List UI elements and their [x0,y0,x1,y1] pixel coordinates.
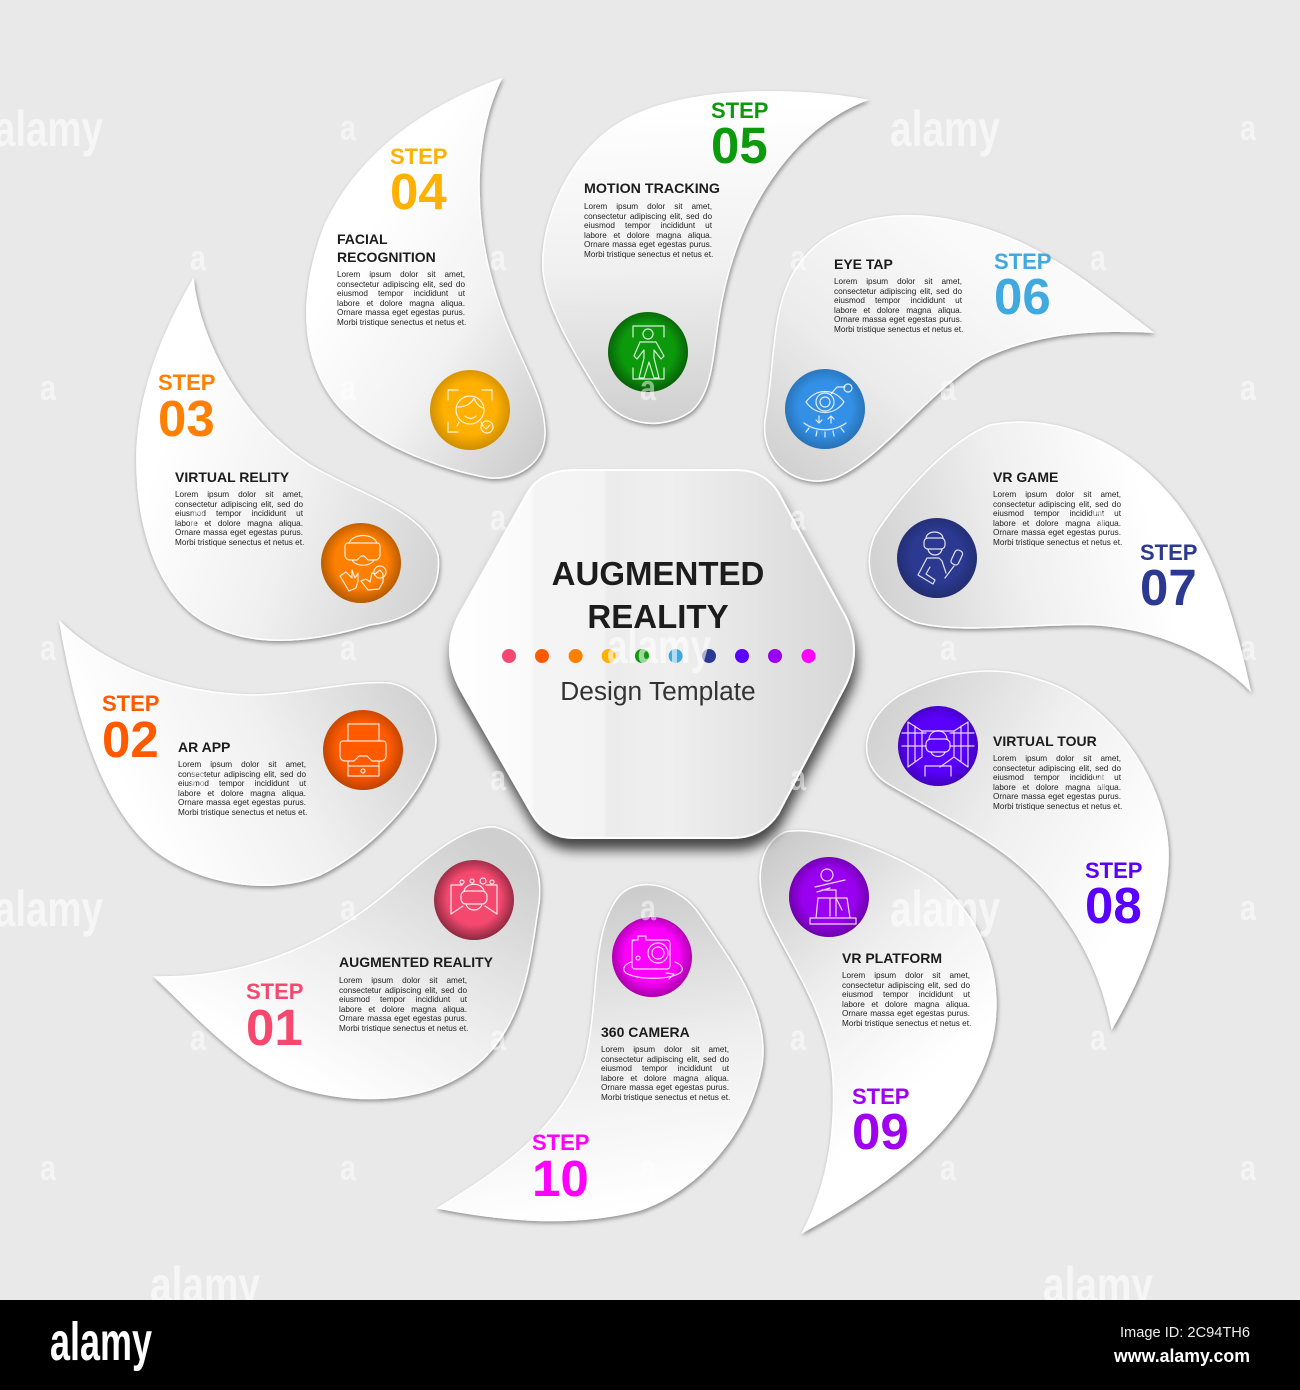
text block 04: Ornare massa eget egestas purus. [337,308,465,317]
heading: facial recognition: RECOGNITION [337,249,436,265]
watermarks: alamy [150,1257,260,1313]
watermarks: a [340,107,357,148]
text block 10 [601,1045,735,1105]
text block 01: Morbi tristique senectus et netus et. [339,1024,468,1033]
watermarks: a [640,887,657,928]
text block 03: eiusmod tempor incididunt ut [175,509,303,518]
center hexagon panel [450,470,854,838]
icon: phone and goggles [323,710,403,790]
text block 07: Morbi tristique senectus et netus et. [993,538,1122,547]
text block 01: labore et dolore magna aliqua. [339,1005,467,1014]
text block 08: Morbi tristique senectus et netus et. [993,802,1122,811]
watermarks: alamy [1043,1257,1153,1313]
watermarks: a [490,497,507,538]
icon: motion tracked body [608,312,688,392]
watermarks: a [40,627,57,668]
step label 02: STEP [102,691,159,716]
text block 09: Lorem ipsum dolor sit amet, [842,971,970,980]
step label 05: 05 [711,117,768,174]
text block 10: consectetur adipiscing elit, sed do [601,1055,729,1064]
text block 07 [993,490,1127,550]
text block 04: Morbi tristique senectus et netus et. [337,318,466,327]
text block 06: Lorem ipsum dolor sit amet, [834,277,962,286]
text block 05: consectetur adipiscing elit, sed do [584,212,712,221]
text block 02: Ornare massa eget egestas purus. [178,798,306,807]
icon: ar headset [434,860,514,940]
text block 05: eiusmod tempor incididunt ut [584,221,712,230]
watermarks: a [340,1147,357,1188]
watermarks: a [1240,627,1257,668]
text block 01: eiusmod tempor incididunt ut [339,995,467,1004]
step label 10: 10 [532,1150,589,1207]
watermarks: a [190,1017,207,1058]
watermarks: a [640,1147,657,1188]
text block 02: eiusmod tempor incididunt ut [178,779,306,788]
step label 03: 03 [158,390,215,447]
step label 04: 04 [390,163,447,220]
watermarks: a [940,627,957,668]
icon: goggles and hands [321,523,401,603]
text block 05: Morbi tristique senectus et netus et. [584,250,713,259]
heading: facial recognition: FACIAL [337,231,388,247]
text block 10: eiusmod tempor incididunt ut [601,1064,729,1073]
text block 06: labore et dolore magna aliqua. [834,306,962,315]
text block 08: Ornare massa eget egestas purus. [993,792,1121,801]
text block 08 [993,754,1127,814]
text block 05 [584,202,718,262]
heading: facial recognition [337,231,436,265]
step label 06: STEP [994,249,1051,274]
watermarks: a [1240,107,1257,148]
panel: step 10 360 camera [438,885,763,1221]
center title: AUGMENTED [552,555,764,592]
watermarks: a [190,237,207,278]
footer bar [0,1300,1300,1390]
heading: vr game: VR GAME [993,469,1058,485]
watermarks: alamy [890,101,1000,157]
watermarks: a [790,1017,807,1058]
heading: eye tap: EYE TAP [834,256,893,272]
text block 07: consectetur adipiscing elit, sed do [993,500,1121,509]
watermarks: a [1240,367,1257,408]
text block 05: Ornare massa eget egestas purus. [584,240,712,249]
step label 01: 01 [246,999,303,1056]
text block 04: consectetur adipiscing elit, sed do [337,280,465,289]
watermarks: a [190,497,207,538]
watermarks: a [340,367,357,408]
icon: eye tap [785,369,865,449]
text block 09: eiusmod tempor incididunt ut [842,990,970,999]
footer url: www.alamy.com [1113,1346,1250,1366]
step label 01: STEP [246,979,303,1004]
step label 09: 09 [852,1103,909,1160]
icon: face scan [430,370,510,450]
center title [552,555,764,635]
icon: virtual tour room [898,706,978,786]
text block 08: Lorem ipsum dolor sit amet, [993,754,1121,763]
text block 07: Lorem ipsum dolor sit amet, [993,490,1121,499]
text block 01 [339,976,473,1036]
panel: step 07 vr game [869,422,1250,690]
step label 06: 06 [994,268,1051,325]
heading: virtual reality: VIRTUAL RELITY [175,469,290,485]
center title: REALITY [587,598,729,635]
watermarks: a [40,367,57,408]
text block 03: Morbi tristique senectus et netus et. [175,538,304,547]
heading: vr platform: VR PLATFORM [842,950,942,966]
watermarks: a [1090,497,1107,538]
heading: augmented reality: AUGMENTED REALITY [339,954,494,970]
text block 01: consectetur adipiscing elit, sed do [339,986,467,995]
text block 10: Ornare massa eget egestas purus. [601,1083,729,1092]
watermarks: a [340,627,357,668]
text block 06: eiusmod tempor incididunt ut [834,296,962,305]
text block 02: labore et dolore magna aliqua. [178,789,306,798]
step label 02: 02 [102,711,159,768]
step colour dots [502,649,816,663]
text block 06 [834,277,968,337]
heading: motion tracking: MOTION TRACKING [584,180,720,196]
icon: 360 camera [612,917,692,997]
text block 09 [842,971,976,1031]
watermarks: a [40,1147,57,1188]
text block 08: eiusmod tempor incididunt ut [993,773,1121,782]
panel: step 03 virtual reality [137,280,439,640]
text block 09: Morbi tristique senectus et netus et. [842,1019,971,1028]
heading: virtual tour: VIRTUAL TOUR [993,733,1097,749]
footer logo: alamy [50,1312,152,1372]
text block 04: eiusmod tempor incididunt ut [337,289,465,298]
text block 03 [175,490,309,550]
watermarks: a [1090,1017,1107,1058]
text block 06: Ornare massa eget egestas purus. [834,315,962,324]
text block 01: Lorem ipsum dolor sit amet, [339,976,467,985]
watermarks: a [640,367,657,408]
icon: vr gamer [897,518,977,598]
watermarks: a [490,237,507,278]
panel: step 06 eye tap [765,216,1152,481]
heading: ar app: AR APP [178,739,230,755]
text block 03: Ornare massa eget egestas purus. [175,528,303,537]
text block 09: labore et dolore magna aliqua. [842,1000,970,1009]
watermarks: a [790,757,807,798]
footer image id: Image ID: 2C94TH6 [1120,1324,1250,1341]
text block 02: Morbi tristique senectus et netus et. [178,808,307,817]
step label 09: STEP [852,1084,909,1109]
panel: step 02 ar app [60,622,436,885]
text block 02: consectetur adipiscing elit, sed do [178,770,306,779]
text block 03: consectetur adipiscing elit, sed do [175,500,303,509]
watermarks: a [1090,237,1107,278]
watermarks: a [490,1017,507,1058]
center subtitle: Design Template [560,676,756,706]
panel: step 04 facial recognition [307,79,545,478]
text block 02: Lorem ipsum dolor sit amet, [178,760,306,769]
text block 05: labore et dolore magna aliqua. [584,231,712,240]
text block 06: Morbi tristique senectus et netus et. [834,325,963,334]
text block 07: labore et dolore magna aliqua. [993,519,1121,528]
panel: step 01 augmented reality [155,827,540,1099]
watermarks: a [190,757,207,798]
text block 07: eiusmod tempor incididunt ut [993,509,1121,518]
step label 10: STEP [532,1130,589,1155]
text block 10: Lorem ipsum dolor sit amet, [601,1045,729,1054]
watermarks: a [490,757,507,798]
watermarks: a [340,887,357,928]
text block 03: Lorem ipsum dolor sit amet, [175,490,303,499]
watermarks: a [790,497,807,538]
text block 09: Ornare massa eget egestas purus. [842,1009,970,1018]
watermarks: a [790,237,807,278]
text block 10: Morbi tristique senectus et netus et. [601,1093,730,1102]
watermarks: a [1240,1147,1257,1188]
watermarks: a [1090,757,1107,798]
step label 05: STEP [711,98,768,123]
step label 08: 08 [1085,877,1142,934]
text block 08: labore et dolore magna aliqua. [993,783,1121,792]
text block 04: labore et dolore magna aliqua. [337,299,465,308]
text block 10: labore et dolore magna aliqua. [601,1074,729,1083]
text block 04 [337,270,471,330]
text block 08: consectetur adipiscing elit, sed do [993,764,1121,773]
panel: step 05 motion tracking [543,92,866,423]
watermarks: a [1240,887,1257,928]
step label 07: 07 [1140,559,1197,616]
icon: vr platform [789,857,869,937]
watermarks: alamy [890,881,1000,937]
text block 01: Ornare massa eget egestas purus. [339,1014,467,1023]
text block 07: Ornare massa eget egestas purus. [993,528,1121,537]
step label 07: STEP [1140,540,1197,565]
panel: step 08 virtual tour [867,671,1168,1028]
text block 06: consectetur adipiscing elit, sed do [834,287,962,296]
step label 08: STEP [1085,858,1142,883]
step label 03: STEP [158,370,215,395]
text block 03: labore et dolore magna aliqua. [175,519,303,528]
watermarks: alamy [607,621,711,674]
text block 02 [178,760,312,820]
text block 04: Lorem ipsum dolor sit amet, [337,270,465,279]
watermarks: a [940,1147,957,1188]
heading: 360 camera: 360 CAMERA [601,1024,690,1040]
text block 05: Lorem ipsum dolor sit amet, [584,202,712,211]
step label 04: STEP [390,144,447,169]
text block 09: consectetur adipiscing elit, sed do [842,981,970,990]
panel: step 09 vr platform [760,831,996,1232]
watermarks: a [940,367,957,408]
